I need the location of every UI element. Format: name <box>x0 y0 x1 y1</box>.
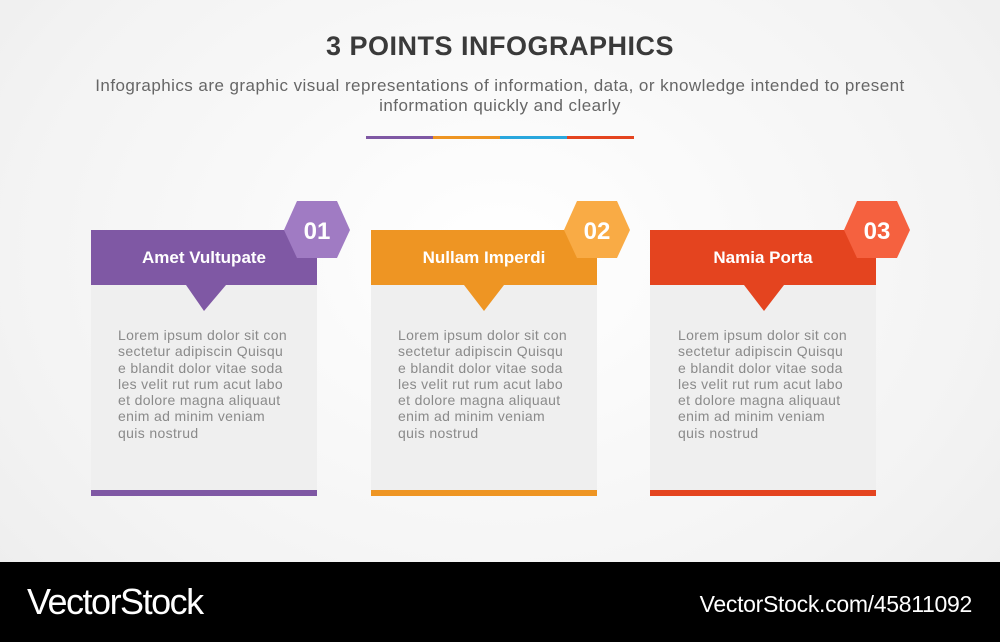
subtitle: information quickly and clearly <box>379 96 621 115</box>
hexagon 02 <box>564 201 630 258</box>
footer logo: VectorStock <box>27 581 203 622</box>
text 3 <box>678 327 847 441</box>
subtitle <box>95 76 905 115</box>
header 1: Amet Vultupate <box>142 248 266 267</box>
text 2: e blandit dolor vitae soda <box>398 360 563 376</box>
hexagon 01: 01 <box>304 218 330 245</box>
text 2: sectetur adipiscin Quisqu <box>398 343 563 359</box>
text 3: Lorem ipsum dolor sit con <box>678 327 847 343</box>
header 2 <box>371 230 597 285</box>
footer band <box>0 562 1000 642</box>
text 2: et dolore magna aliquaut <box>398 392 561 408</box>
hexagon 03: 03 <box>864 218 890 245</box>
subtitle: Infographics are graphic visual representations of information, data, or knowledge intended to present <box>95 76 905 95</box>
hexagon 01 <box>284 201 350 258</box>
panel: card 1 <box>91 201 350 496</box>
pointer 2 <box>464 285 504 311</box>
text 3: quis nostrud <box>678 425 758 441</box>
text 1: sectetur adipiscin Quisqu <box>118 343 283 359</box>
text 2: enim ad minim veniam <box>398 408 545 424</box>
text 1: enim ad minim veniam <box>118 408 265 424</box>
title: 3 POINTS INFOGRAPHICS <box>326 31 674 61</box>
text 1: e blandit dolor vitae soda <box>118 360 283 376</box>
text 2 <box>398 327 567 441</box>
text 1: les velit rut rum acut labo <box>118 376 283 392</box>
hexagon 02: 02 <box>584 218 610 245</box>
pointer 3 <box>744 285 784 311</box>
header 3 <box>650 230 876 285</box>
hexagon 03 <box>844 201 910 258</box>
pointer 1 <box>186 285 226 311</box>
panel: card 3 <box>650 201 910 496</box>
text 3: e blandit dolor vitae soda <box>678 360 843 376</box>
text 1: et dolore magna aliquaut <box>118 392 281 408</box>
text 1: Lorem ipsum dolor sit con <box>118 327 287 343</box>
text 3: enim ad minim veniam <box>678 408 825 424</box>
text 1: quis nostrud <box>118 425 198 441</box>
footer id: VectorStock.com/45811092 <box>700 591 972 617</box>
text 3: sectetur adipiscin Quisqu <box>678 343 843 359</box>
text 3: et dolore magna aliquaut <box>678 392 841 408</box>
panel: card 2 <box>371 201 630 496</box>
text 2: Lorem ipsum dolor sit con <box>398 327 567 343</box>
header 3: Namia Porta <box>713 248 813 267</box>
header 2: Nullam Imperdi <box>423 248 545 267</box>
color divider <box>366 136 634 139</box>
text 3: les velit rut rum acut labo <box>678 376 843 392</box>
text 2: les velit rut rum acut labo <box>398 376 563 392</box>
header 1 <box>91 230 317 285</box>
text 2: quis nostrud <box>398 425 478 441</box>
text 1 <box>118 327 287 441</box>
